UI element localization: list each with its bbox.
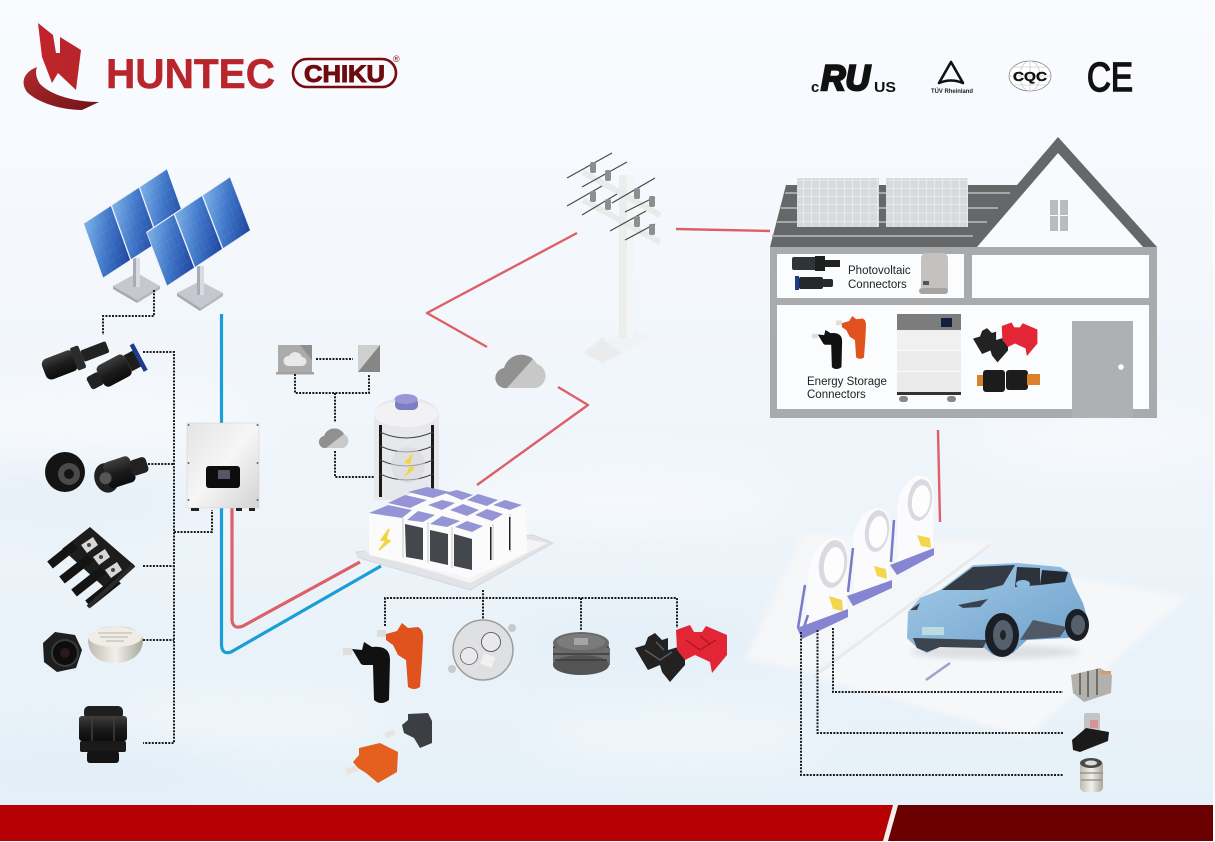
label: energy storage connectors: Energy Storage: [807, 376, 887, 388]
house small connectors: [977, 370, 1040, 392]
base plate: [356, 535, 553, 590]
home battery stack: [897, 314, 961, 402]
EV charging scene: [745, 476, 1187, 792]
car windows: [942, 565, 1068, 590]
house PV connector bottom: [795, 276, 833, 290]
grey plug connector: [384, 713, 432, 748]
TUV Rheinland mark: TÜV Rheinland: [931, 86, 973, 95]
high voltage elbow connectors: [343, 623, 423, 703]
storage connectors: [343, 620, 727, 783]
laptop: [276, 345, 314, 374]
car grille: [922, 627, 944, 635]
utility pole: [567, 153, 660, 363]
panel array left: [83, 168, 187, 279]
logo mark: [24, 23, 99, 110]
house: [770, 137, 1157, 418]
MC4 connector pair: [40, 335, 148, 397]
label: photovoltaic connectors: Connectors: [848, 279, 907, 291]
stand right: [177, 266, 223, 311]
footer band: [0, 805, 1213, 841]
HUNTEC wordmark: HUNTEC: [106, 50, 275, 97]
terminal block: [50, 527, 134, 607]
battery tower: [374, 394, 439, 500]
panel array right: [146, 176, 251, 287]
inverter: [187, 423, 259, 511]
roof solar modules: [797, 178, 968, 227]
CQC mark: [1009, 61, 1051, 91]
module block: [369, 487, 527, 578]
grid feed lines: [427, 229, 940, 522]
TUV Rheinland mark: [931, 62, 973, 95]
HUNTEC logo: [24, 23, 400, 110]
dotted links: left product column: [103, 290, 212, 743]
stand left: [113, 258, 160, 303]
house PV connector top: [792, 256, 840, 271]
relay product: [1072, 713, 1109, 752]
small cloud: [319, 428, 348, 448]
door: [1072, 321, 1133, 418]
gable: [977, 153, 1143, 247]
UL mark: US: [874, 79, 896, 96]
label: photovoltaic connectors: Photovoltaic: [848, 265, 911, 277]
charger 1: [797, 537, 850, 639]
solar panels: [83, 168, 251, 311]
UL mark: RU: [821, 59, 871, 98]
vent plug: [553, 632, 610, 675]
UL mark: c: [811, 79, 819, 96]
room: energy storage: [777, 305, 1149, 409]
car headlight: [958, 599, 988, 608]
metal vent cap: [88, 626, 143, 663]
electric car: [907, 563, 1089, 659]
charger 3: [890, 476, 935, 575]
cable gland: [79, 706, 127, 763]
label: energy storage connectors: Connectors: [807, 389, 866, 401]
CHIKU badge: [293, 54, 400, 88]
pressure relief plate: [448, 620, 516, 680]
hex nut: [43, 632, 82, 672]
dotted links: storage products: [385, 590, 677, 630]
terminal block product: [1071, 668, 1112, 702]
house storage connectors: [812, 316, 866, 369]
dotted links: charger products: [801, 628, 1063, 775]
house inverter: [919, 253, 948, 294]
car wheels: [985, 609, 1089, 657]
charging platform: [745, 533, 1187, 737]
left connectors: [40, 335, 152, 763]
battery storage station: [356, 394, 553, 590]
inverter display: [206, 466, 240, 488]
house walls: [770, 247, 1157, 418]
metal gland product: [1080, 758, 1103, 792]
CHIKU badge: ®: [393, 54, 400, 64]
car mirror: [1016, 580, 1030, 588]
monitoring devices: [276, 345, 380, 477]
CQC mark: CQC: [1013, 69, 1048, 84]
orange plug connector: [345, 743, 398, 783]
parked cable: [926, 663, 950, 680]
house black and red connectors: [973, 322, 1037, 362]
room: photovoltaic: [777, 253, 964, 298]
dotted links: monitoring: [295, 359, 376, 477]
power cables from panels to storage: [222, 314, 381, 653]
round connector pair: [45, 450, 152, 496]
roof battens: [772, 193, 1010, 236]
roof: [770, 137, 1157, 247]
cloud: [495, 355, 546, 388]
attic window: [1050, 200, 1068, 231]
charger 2: [847, 508, 892, 606]
CHIKU badge: CHIKU: [304, 61, 385, 88]
room: upper right: [972, 255, 1149, 298]
UL mark: [811, 59, 896, 98]
CE mark: CE: [1087, 54, 1133, 100]
certification marks: [811, 54, 1133, 100]
tablet: [358, 345, 380, 372]
pole wires: [567, 153, 655, 240]
black and red busbar connectors: [635, 625, 727, 682]
insulators: [590, 162, 655, 235]
